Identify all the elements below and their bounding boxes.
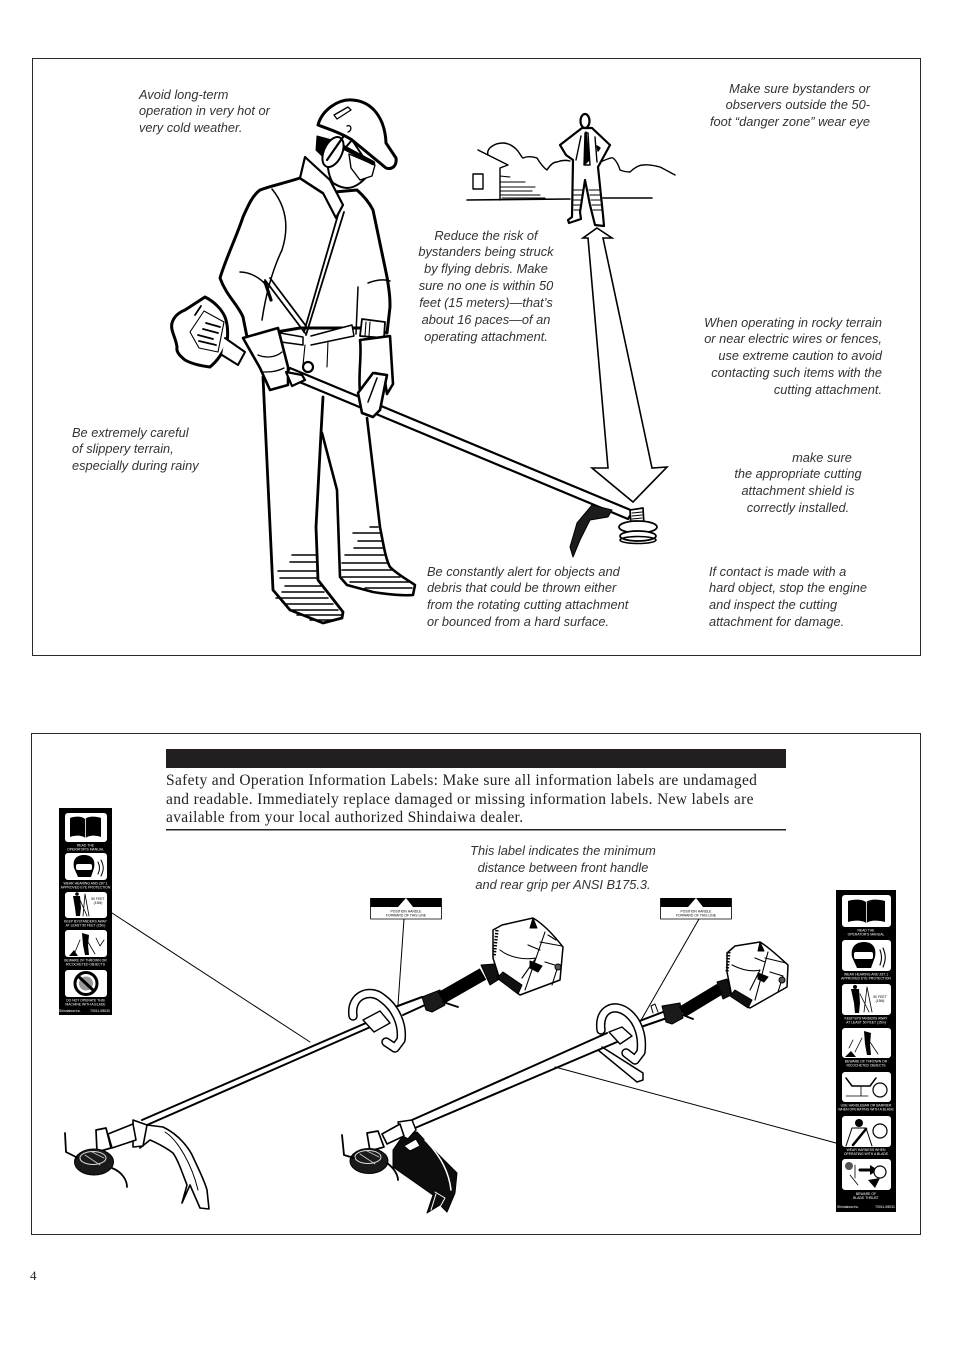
position tag right: POSITION HANDLE [681,910,712,914]
position tag right [660,898,732,919]
trimmer head [74,1149,114,1175]
black title bar [166,749,786,768]
arrow: fifty foot distance [583,228,667,502]
panel: protection [65,853,107,880]
jacket [220,178,390,337]
left glove [243,328,288,390]
bystander [560,128,610,226]
safety label left: AT LEAST 50 FEET (15m) [66,924,105,928]
panel: manual [65,813,107,842]
shaft [285,368,633,519]
illustration: bystander and landscape [467,114,675,226]
clamp [303,362,313,372]
black shield [393,1132,457,1213]
caption: slippery terrain: Be extremely careful of slippery terrain, especially during rainy [72,424,199,473]
safety label right: WEAR HARNESS WHEN [847,1148,886,1152]
intro text: Safety and Operation Information Labels: Make sure all information labels are undamaged and readable. Immediately replace damaged or missing information labels. New labels are available from your local authorized Shindaiwa dealer. [166,772,757,826]
loop handle [601,1008,641,1060]
safety label right: RICOCHETED OBJECTS [846,1064,886,1068]
left leg [263,377,343,623]
caption: shield: make sure [792,450,852,464]
panel: bystanders: (15M) [876,999,884,1003]
position tag left: POSITION HANDLE [391,910,422,914]
safety label right: BEWARE OF THROWN OR [845,1060,888,1064]
trimmer head [350,1148,388,1174]
barrier bar [598,1047,643,1082]
illustration: operator with trimmer [172,100,657,623]
cutter head [630,508,644,526]
position tag left [370,898,442,919]
panel: labels frame [31,733,921,1235]
page number: 4 [30,1268,36,1283]
front shaft [412,1033,617,1128]
caption: debris: Be constantly alert for objects and debris that could be thrown either from the rotating cutting attachment or bounced from a hard surface. [427,564,628,629]
grip [682,989,720,1012]
safety label right [836,890,896,1212]
safety label left: OPERATOR'S MANUAL [67,848,104,852]
safety label left: MACHINE WITH A BLADE [65,1002,106,1006]
safety label right: KEEP BYSTANDERS AWAY [845,1016,888,1020]
gear case [398,1120,416,1139]
hair [316,136,332,156]
engine [172,297,228,367]
caption: shield: the appropriate cutting attachment shield is correctly installed. [734,466,862,515]
helmet [318,100,396,169]
panel: thrown objects [65,930,107,957]
front shaft [142,1020,375,1125]
curved shield [140,1125,209,1209]
safety label right: USE HANDLEBAR OR BARRIER [841,1104,892,1108]
panel: blade thrust [842,1159,891,1190]
safety label left: KEEP BYSTANDERS AWAY [64,920,108,924]
safety label left: RICOCHETED OBJECTS [66,962,106,966]
throttle [662,1003,683,1024]
safety label left: WEAR HEARING AND Z87.1 [63,882,108,886]
safety label right: OPERATOR'S MANUAL [848,932,884,936]
caption: ANSI label: This label indicates the minimum distance between front handle and rear grip per ANSI B175.3. [470,843,656,892]
panel: field safety frame [32,58,921,656]
caption: hard object: If contact is made with a hard object, stop the engine and inspect the cutting attachment for damage. [709,564,867,629]
caption: bystander distance: Reduce the risk of bystanders being struck by flying debris. Make sure no one is within 50 feet (15 meters)—that’s about 16 paces—of an operating attachment. [418,228,554,344]
rear shaft [637,1012,667,1028]
engine [493,918,563,995]
panel: thrown objects [842,1028,891,1058]
caption: rocky terrain: When operating in rocky terrain or near electric wires or fences, use extreme caution to avoid contacting such items with the cutting attachment. [704,314,882,397]
right arm cuff [360,319,385,338]
right glove [359,336,393,394]
safety label right: BEWARE OF [856,1192,876,1196]
panel: manual [842,895,891,927]
illustration: trimmer with curved shield [65,918,563,1209]
handle loop [358,373,387,417]
position tag left: FORWARD OF THIS LINE [386,914,427,918]
safety label right: READ THE [857,928,875,932]
sleeve lines and harness [240,189,390,334]
safety label left: APPROVED EYE PROTECTION [61,886,111,890]
safety label right: WEAR HEARING AND Z87.1 [844,972,888,976]
engine [727,942,788,1008]
illustration: trimmer with blade shield [342,942,788,1213]
leader lines to labels [112,913,836,1143]
grip [441,974,483,998]
panel: no blade [65,970,107,997]
goggles [349,154,375,180]
safety label right: BLADE THRUST [853,1196,879,1200]
safety label left: 70011-98030 [90,1009,110,1013]
safety label left: READ THE [77,844,95,848]
safety label right: Shindaiwa Inc. [837,1205,859,1209]
rule under intro [166,829,786,830]
panel: bystanders: 50 FEET [873,995,887,999]
panel: protection [842,940,891,971]
loop handle [353,994,401,1048]
face [328,140,372,188]
safety label right: APPROVED EYE PROTECTION [841,976,891,980]
throttle [422,990,445,1012]
safety label left [59,808,112,1015]
safety label left: DO NOT OPERATE THIS [66,998,106,1002]
panel: barrier [842,1072,891,1102]
safety label left: Shindaiwa Inc. [59,1009,81,1013]
panel: bystanders: (15M) [94,901,102,905]
ear muff [318,134,348,170]
caption: weather: Avoid long-term operation in very hot or very cold weather. [139,86,270,135]
rear shaft [395,997,425,1015]
right leg [322,418,415,595]
panel: harness [842,1116,891,1147]
panel: bystanders [65,892,107,918]
panel: bystanders [842,984,891,1015]
safety label right: 70011-98031 [875,1205,895,1209]
collar [300,157,343,218]
belt [280,325,354,345]
trouser hatching [276,527,412,620]
panel: bystanders: 50 FEET [91,897,105,901]
safety label right: AT LEAST 50 FEET (15m) [846,1020,886,1024]
caption: eye protection: Make sure bystanders or observers outside the 50- foot “danger zone” wear eye [710,80,870,129]
safety label right: WHEN OPERATING WITH A BLADE [838,1108,894,1112]
safety label left: BEWARE OF THROWN OR [64,958,107,962]
position tag right: FORWARD OF THIS LINE [676,914,717,918]
gear case [133,1120,147,1147]
safety label right: OPERATING WITH A BLADE [844,1152,889,1156]
shield [570,505,612,557]
